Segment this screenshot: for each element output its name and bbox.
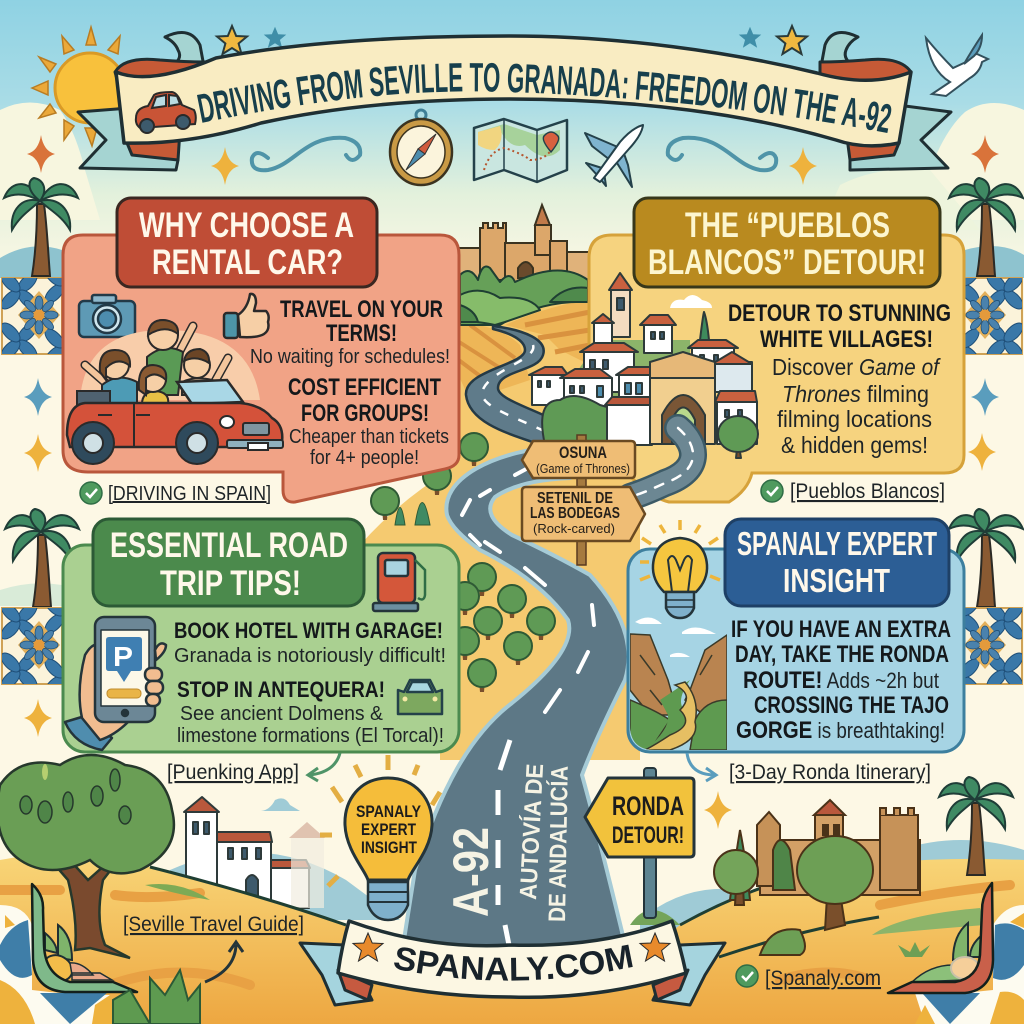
icon: thumbs up (224, 294, 269, 338)
palm trees and side tiles (0, 178, 1024, 698)
central landscape: fields and hills (360, 300, 640, 760)
bottom banner: spanaly.com: SPANALY.COM (394, 944, 633, 981)
icon: dove (926, 35, 988, 96)
insight text: GORGE is breathtaking! (736, 717, 945, 744)
icon: small green car (398, 680, 442, 714)
benefit text: No waiting for schedules! (250, 346, 450, 368)
benefit text (250, 296, 450, 469)
bottom banner: spanaly.com (336, 919, 687, 999)
illustration: happy family in red convertible (67, 320, 283, 464)
link: puenking app: [Puenking App] (167, 761, 299, 784)
castle on the hill (456, 205, 590, 292)
lightbulb: spanaly expert insight: SPANALY (356, 802, 422, 821)
heading text (737, 525, 937, 599)
title ribbon tails and curls (78, 32, 951, 170)
illustration: white village (529, 273, 758, 458)
link: spanaly.com: [Spanaly.com (765, 967, 881, 990)
sign: Ronda detour: DETOUR! (612, 822, 684, 849)
green hills (460, 266, 588, 325)
icon: phone in hand with parking app (65, 617, 166, 750)
clouds (0, 102, 1024, 230)
tips text: limestone formations (El Torcal)! (177, 725, 444, 747)
olive tree left (0, 755, 174, 958)
heading text: WHY CHOOSE A (139, 206, 354, 245)
link: 3-day ronda itinerary (687, 753, 931, 784)
icon: sun (32, 27, 125, 146)
tips text: Granada is notoriously difficult! (174, 645, 446, 667)
heading text: SPANALY EXPERT (737, 525, 937, 562)
heading box (634, 198, 940, 287)
icon: lightbulb (640, 520, 720, 618)
detour text: Discover Game of (772, 354, 941, 380)
icon: airplane (585, 125, 643, 187)
illustration: Tajo gorge (630, 617, 727, 750)
panel: pueblos blancos detour (529, 198, 964, 502)
icon: phone in hand with parking app: P (113, 641, 133, 672)
title banner (114, 34, 913, 148)
benefit text: Cheaper than tickets (289, 426, 449, 448)
decorative sparkles (24, 135, 999, 829)
detour text: Thrones filming (782, 381, 929, 407)
hilltop castle with trees (714, 800, 920, 955)
heading text: BLANCOS” DETOUR! (648, 243, 926, 282)
icon: fuel pump (373, 553, 425, 611)
heading text (139, 206, 354, 282)
link: puenking app (167, 753, 340, 784)
heading text: THE “PUEBLOS (685, 206, 890, 245)
sign: Setenil de las Bodegas: (Rock-carved) (533, 521, 615, 536)
panel: essential road trip tips (63, 519, 459, 752)
heading text: RENTAL CAR? (152, 243, 343, 282)
lightbulb: spanaly expert insight (320, 755, 440, 920)
benefit text: for 4+ people! (310, 447, 419, 469)
sign: Osuna: OSUNA (559, 443, 607, 462)
sign: Osuna (522, 441, 635, 478)
benefit text: FOR GROUPS! (301, 400, 429, 427)
insight text: IF YOU HAVE AN EXTRA (731, 616, 951, 643)
icon: compass (390, 110, 452, 185)
sign: Ronda detour: RONDA (612, 791, 684, 821)
link: driving in spain: [DRIVING IN SPAIN] (108, 483, 271, 505)
decorative stars (217, 26, 807, 54)
tips text: BOOK HOTEL WITH GARAGE! (174, 618, 443, 643)
benefit text: COST EFFICIENT (288, 374, 441, 401)
insight text: ROUTE! Adds ~2h but (743, 667, 939, 694)
sign: Osuna: (Game of Thrones) (536, 462, 630, 476)
bottom banner ribbons (300, 943, 725, 1005)
insight text (731, 616, 951, 744)
link: spanaly.com (736, 965, 881, 990)
benefit text: TERMS! (326, 320, 397, 347)
panel: spanaly expert insight (628, 519, 964, 752)
road branch to village gate (630, 428, 693, 497)
bottom right corner tile and bracket (888, 883, 1024, 1024)
detour text (728, 300, 951, 458)
heading text (648, 206, 926, 282)
road: main A-92 (400, 445, 630, 965)
tips text: STOP IN ANTEQUERA! (177, 677, 385, 702)
heading text: TRIP TIPS! (160, 564, 301, 603)
benefit text: TRAVEL ON YOUR (280, 296, 443, 323)
link: Seville travel guide: [Seville Travel Guide] (123, 913, 304, 936)
insight text: DAY, TAKE THE RONDA (735, 641, 949, 668)
road signposts (522, 435, 645, 565)
detour text: filming locations (777, 406, 932, 432)
road lettering ANDALUCIA: DE ANDALUCÍA (543, 766, 574, 922)
palm bottom right (939, 777, 1013, 875)
insight text: CROSSING THE TAJO (754, 692, 949, 719)
link: pueblos blancos: [Pueblos Blancos] (790, 480, 945, 503)
heading box (117, 198, 377, 287)
title text: DRIVING FROM SEVILLE TO GRANADA: FREEDOM ON THE A-92 (197, 62, 892, 133)
panel: why choose a rental car (63, 198, 459, 502)
decorative swirls (252, 138, 776, 170)
detour text: WHITE VILLAGES! (760, 326, 933, 353)
heading box (725, 519, 949, 606)
sign: Ronda detour (585, 768, 694, 925)
tips text (174, 618, 446, 747)
detour text: & hidden gems! (781, 432, 928, 458)
distant hills behind side palms (0, 246, 1024, 606)
heading text: INSIGHT (783, 562, 890, 599)
heading text: ESSENTIAL ROAD (110, 526, 348, 565)
road lettering AUTOVIA: AUTOVÍA DE (514, 763, 549, 900)
lightbulb: spanaly expert insight: EXPERT (361, 820, 416, 839)
ground hills (0, 854, 1024, 1024)
icon: camera (79, 295, 135, 337)
road: upper winding section (466, 326, 585, 454)
icon: red car on banner (136, 92, 196, 133)
olive grove (371, 433, 555, 692)
heading box (93, 519, 364, 606)
sign: Setenil de las Bodegas: SETENIL DE (537, 490, 613, 507)
sign: Setenil de las Bodegas: LAS BODEGAS (530, 505, 620, 522)
cloud small (261, 798, 300, 811)
bottom left corner tile and bracket (0, 884, 200, 1024)
road lettering A-92: A-92 (443, 827, 499, 917)
lightbulb: spanaly expert insight: INSIGHT (361, 838, 417, 857)
link: Seville travel guide (123, 913, 304, 982)
white Andalusian buildings (184, 797, 325, 908)
sign: Setenil de las Bodegas (522, 487, 645, 541)
heading text (110, 526, 348, 603)
distant bottom hills (170, 840, 1024, 930)
icon: folded map (474, 119, 567, 182)
detour text: DETOUR TO STUNNING (728, 300, 951, 327)
tips text: See ancient Dolmens & (180, 703, 384, 725)
link: 3-day ronda itinerary: [3-Day Ronda Itinerary] (729, 761, 931, 784)
